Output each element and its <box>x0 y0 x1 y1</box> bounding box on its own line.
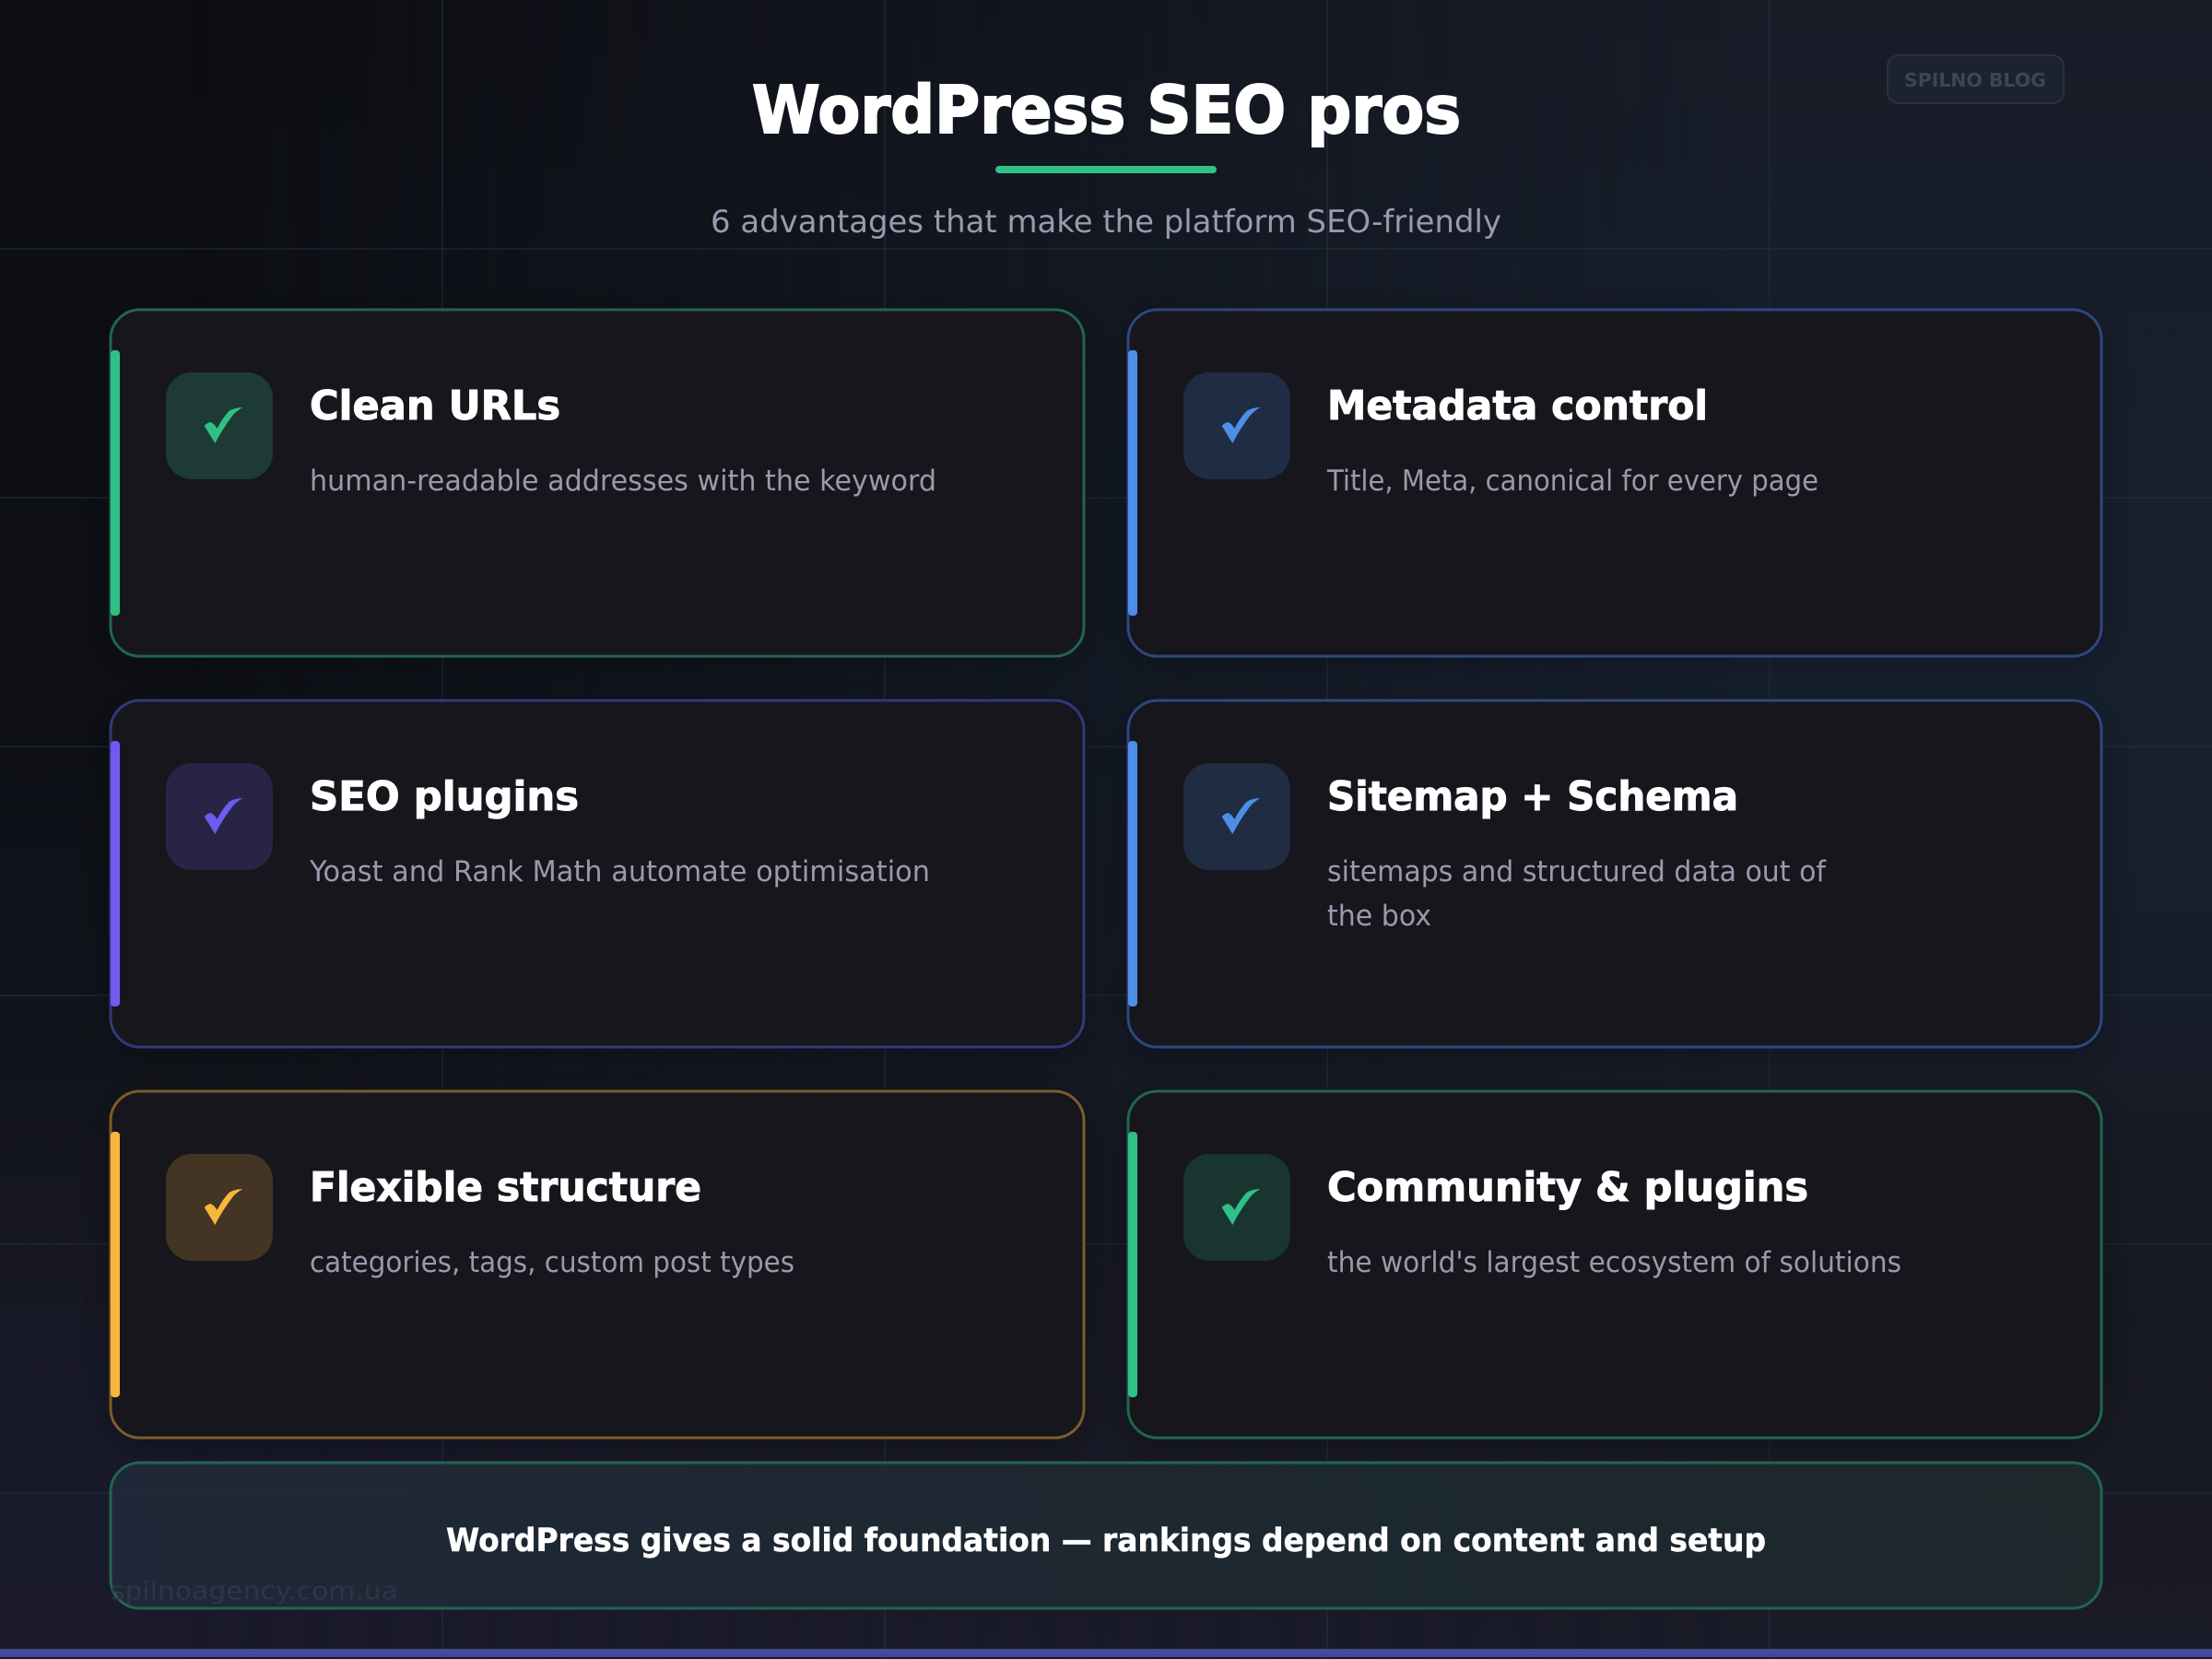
title underline <box>995 166 1217 173</box>
panel: Sitemap + Schema <box>1128 700 2101 1047</box>
panel: SEO plugins <box>111 700 1084 1047</box>
panel: Clean URLs <box>111 310 1084 656</box>
heading: Flexible structure: Flexible structure <box>310 1164 701 1211</box>
bottom accent bar <box>0 1649 2212 1657</box>
text: Sitemap + Schema description <box>1327 855 1827 933</box>
callout: summary banner: WordPress gives a solid foundation — rankings depend on content and setup <box>446 1523 1766 1559</box>
text: Community & plugins description: the world's largest ecosystem of solutions <box>1327 1246 1901 1279</box>
heading: Community & plugins: Community & plugins <box>1327 1164 1808 1211</box>
heading: Sitemap + Schema: Sitemap + Schema <box>1327 773 1738 820</box>
heading: Clean URLs: Clean URLs <box>310 382 560 429</box>
text: Sitemap + Schema description: the box <box>1327 900 1431 933</box>
panel: Flexible structure <box>111 1091 1084 1438</box>
text: Flexible structure description: categories, tags, custom post types <box>310 1246 794 1279</box>
title: WordPress SEO pros <box>752 72 1461 148</box>
icon: purple check <box>166 763 273 870</box>
badge: Spilno Blog: SPILNO BLOG <box>1904 69 2046 91</box>
icon: blue check <box>1183 372 1290 479</box>
text: Sitemap + Schema description: sitemaps and structured data out of <box>1327 855 1827 888</box>
watermark: spilnoagency.com.ua <box>111 1577 398 1606</box>
panel: Community & plugins <box>1128 1091 2101 1438</box>
text: SEO plugins description: Yoast and Rank Math automate optimisation <box>309 855 930 888</box>
text: Clean URLs description: human-readable addresses with the keyword <box>310 465 936 498</box>
callout: summary banner <box>111 1463 2101 1608</box>
icon: blue check <box>1183 763 1290 870</box>
icon: amber check <box>166 1154 273 1261</box>
panel: Metadata control <box>1128 310 2101 656</box>
badge: Spilno Blog <box>1888 55 2064 103</box>
heading: Metadata control: Metadata control <box>1327 382 1708 429</box>
icon: green check <box>1183 1154 1290 1261</box>
icon: green check <box>166 372 273 479</box>
heading: SEO plugins: SEO plugins <box>310 773 579 820</box>
text: Metadata control description: Title, Meta, canonical for every page <box>1326 465 1818 498</box>
subtitle: 6 advantages that make the platform SEO-friendly <box>711 204 1501 241</box>
